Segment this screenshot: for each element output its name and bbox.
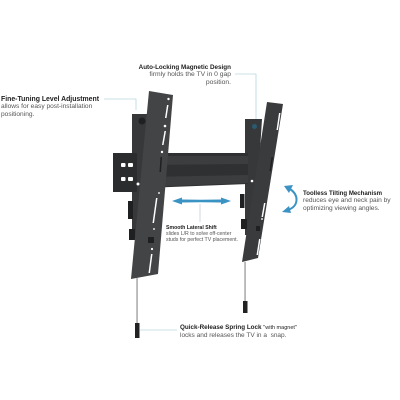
text: toolless tilting mechanism: Toolless Tilting Mechanism xyxy=(303,190,382,196)
text: quick-release spring lock: locks and releases the TV in a snap. xyxy=(180,332,286,339)
mount: left vertical plate xyxy=(131,91,173,279)
text: auto-locking magnetic design: Auto-Locking Magnetic Design xyxy=(139,64,231,70)
text: fine-tuning level adjustment: positioning. xyxy=(1,111,34,118)
text: quick-release spring lock: Quick-Release Spring Lock "with magnet" xyxy=(180,324,297,330)
text: auto-locking magnetic design: position. xyxy=(206,79,231,86)
text: smooth lateral shift xyxy=(166,224,238,242)
text: smooth lateral shift: slides L/R to solve off-center xyxy=(166,230,231,236)
text: quick-release spring lock xyxy=(180,324,297,339)
leader lines xyxy=(104,74,256,330)
text: toolless tilting mechanism: optimizing viewing angles. xyxy=(303,205,380,212)
mount: wall plate with slots xyxy=(113,153,140,192)
mount: horizontal rail xyxy=(145,153,248,188)
icon: magnetic knob xyxy=(252,124,257,129)
text: smooth lateral shift: studs for perfect TV placement. xyxy=(166,236,238,242)
text: fine-tuning level adjustment: Fine-Tuning Level Adjustment xyxy=(1,96,99,102)
mount: right vertical plate xyxy=(242,102,283,262)
spring lock cord: left xyxy=(135,278,140,338)
text: toolless tilting mechanism xyxy=(303,190,391,212)
mount: right arm details xyxy=(240,194,247,229)
arrow: tilting mechanism xyxy=(282,185,297,213)
spring lock cord: right xyxy=(243,262,248,313)
text: toolless tilting mechanism: reduces eye and neck pain by xyxy=(303,197,391,204)
arrow: lateral shift xyxy=(172,198,231,204)
mount: back arms xyxy=(132,114,262,240)
text: fine-tuning level adjustment xyxy=(1,96,99,118)
text: auto-locking magnetic design xyxy=(138,64,231,86)
text: smooth lateral shift: Smooth Lateral Shift xyxy=(166,224,217,230)
text: fine-tuning level adjustment: allows for easy post-installation xyxy=(1,103,92,110)
text: auto-locking magnetic design: firmly holds the TV in 0 gap xyxy=(149,71,231,78)
mount: back-arm knob and side clips xyxy=(128,118,146,240)
